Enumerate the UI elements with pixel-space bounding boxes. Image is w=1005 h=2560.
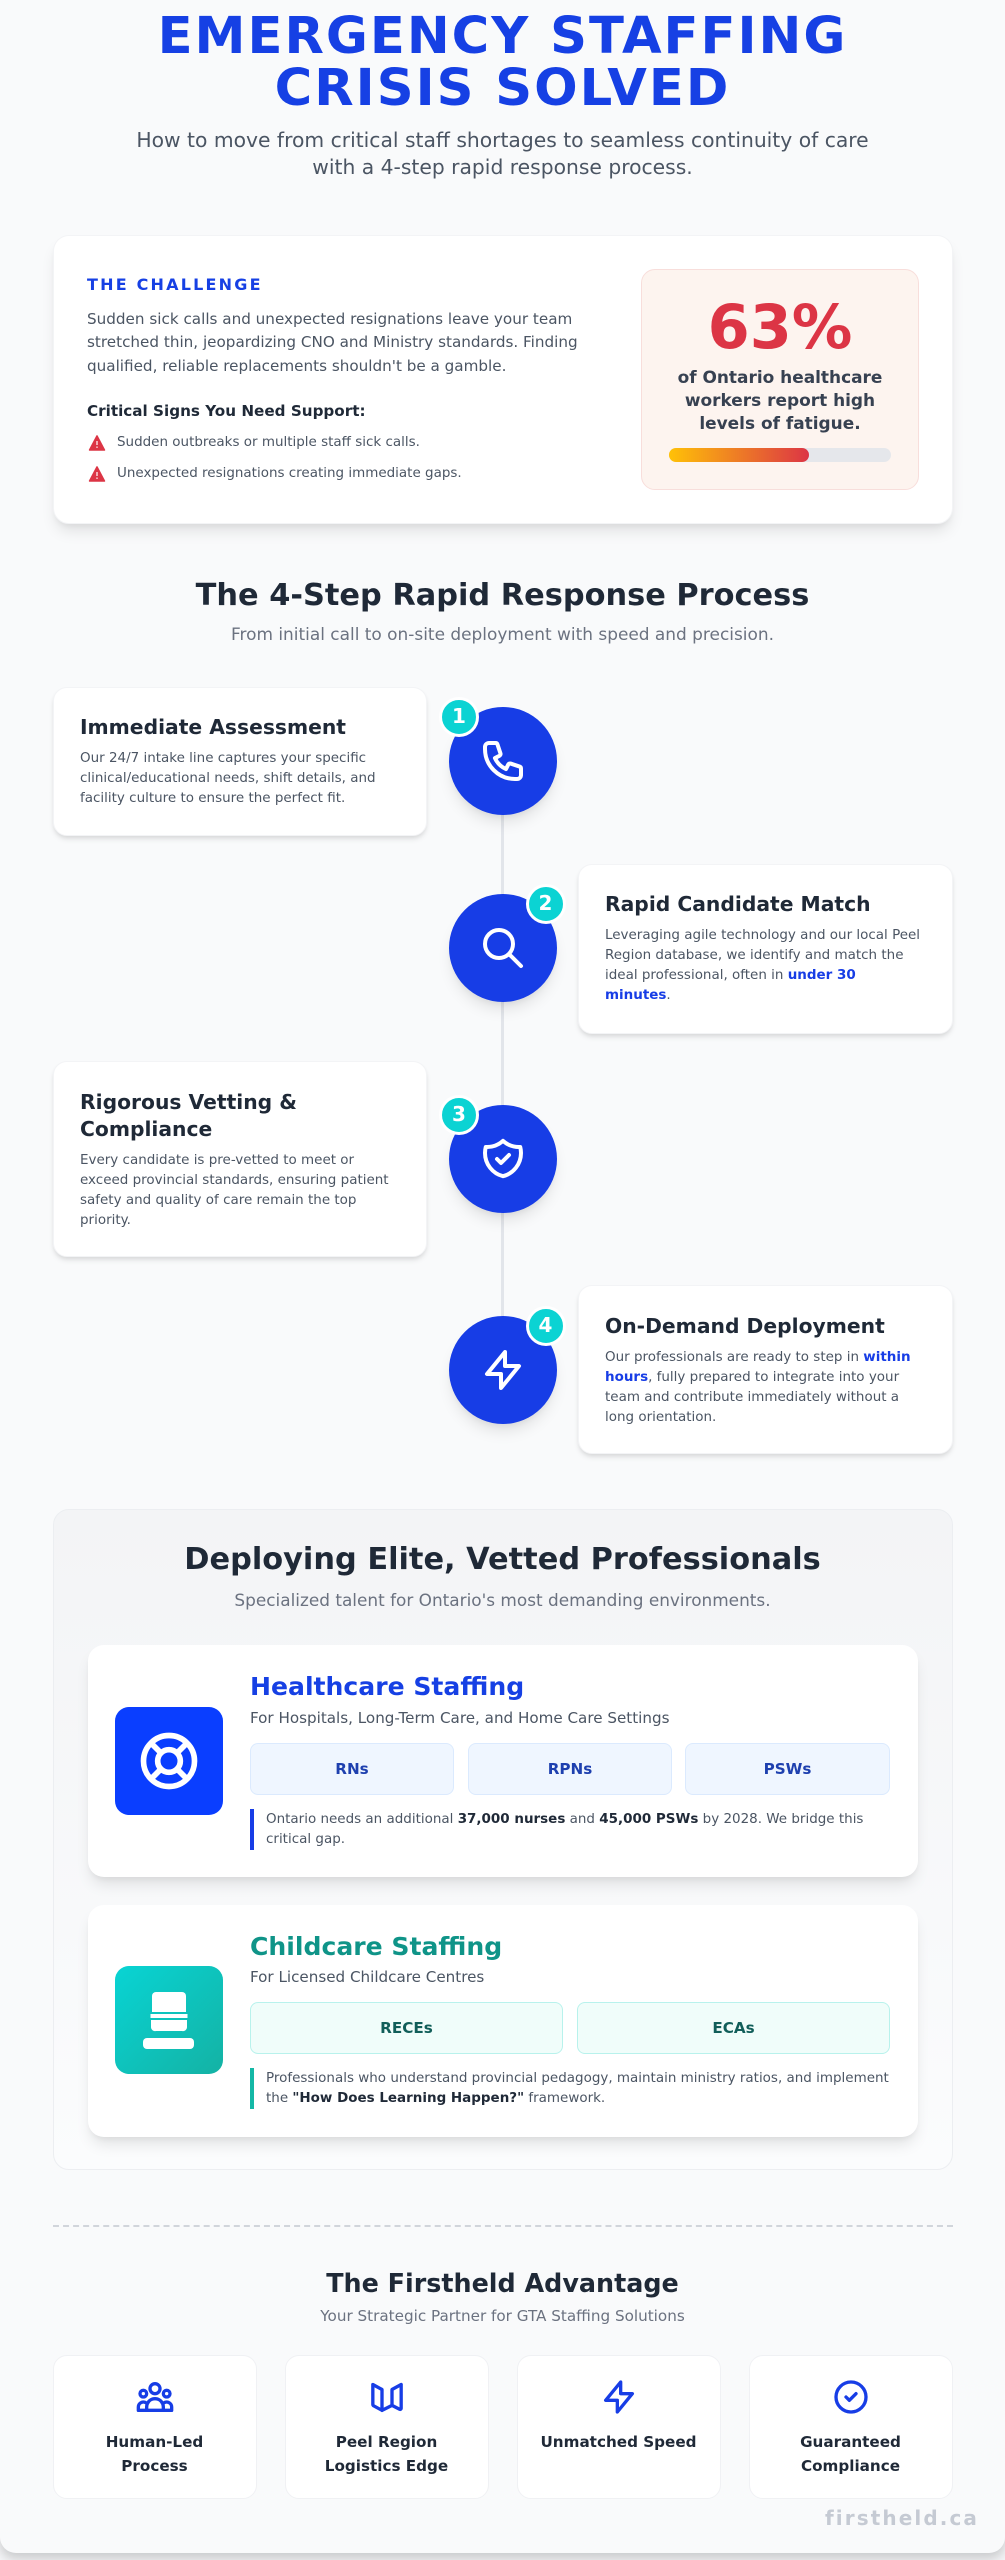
step title: Rapid Candidate Match — [605, 892, 871, 916]
subtitle: How to move from critical staff shortages to seamless continuity of care — [136, 128, 869, 152]
step title: Immediate Assessment — [80, 715, 346, 739]
step 2 badge: 2 — [539, 891, 552, 915]
warning sign 1 — [88, 434, 420, 451]
step 1 badge — [439, 697, 479, 737]
icon: lifebuoy — [115, 1707, 223, 1815]
step text: Leveraging agile technology and our local Peel — [605, 926, 920, 942]
step text: ideal professional, often in under 30 — [605, 967, 856, 983]
tag RPNs: RPNs — [548, 1760, 592, 1778]
step text: long orientation. — [605, 1409, 716, 1425]
advantage card: speed: Unmatched Speed — [540, 2433, 697, 2451]
step text — [80, 750, 376, 806]
step 2 badge — [526, 884, 566, 924]
card title: Healthcare Staffing — [250, 1672, 524, 1701]
step 3 badge: 3 — [452, 1102, 466, 1126]
icon: stack — [115, 1966, 223, 2074]
subtitle — [136, 128, 869, 179]
advantage card: peel region — [284, 2355, 488, 2499]
challenge text: stretched thin, jeopardizing CNO and Ministry standards. Finding — [87, 333, 578, 351]
advantage card: peel region: Logistics Edge — [325, 2457, 448, 2475]
icon: warning triangle — [88, 435, 106, 451]
step text: Our 24/7 intake line captures your specific — [80, 750, 366, 766]
note: Ontario needs an additional 37,000 nurses and 45,000 PSWs by 2028. We bridge this — [266, 1811, 863, 1827]
stat caption — [678, 367, 882, 433]
tag PSWs — [685, 1743, 890, 1795]
step text: exceed provincial standards, ensuring patient — [80, 1172, 389, 1188]
step title: Rigorous Vetting & — [80, 1090, 297, 1114]
advantage card: compliance: Guaranteed — [800, 2433, 901, 2451]
step text — [605, 1348, 911, 1425]
stat caption: levels of fatigue. — [699, 413, 861, 433]
sign text: Sudden outbreaks or multiple staff sick calls. — [117, 434, 420, 450]
step title: Compliance — [80, 1116, 212, 1140]
step 1 icon: phone — [448, 707, 556, 815]
step text: safety and quality of care remain the top — [80, 1192, 356, 1208]
childcare card — [88, 1904, 918, 2136]
stat caption: workers report high — [685, 390, 875, 410]
step text: Region database, we identify and match the — [605, 947, 903, 963]
challenge heading: THE CHALLENGE — [87, 275, 263, 294]
step 4 card — [578, 1285, 952, 1454]
process heading: The 4-Step Rapid Response Process — [196, 578, 809, 612]
tag ECAs — [577, 2002, 890, 2054]
step 3 badge — [439, 1095, 479, 1135]
tag ECAs: ECAs — [712, 2019, 755, 2037]
advantage card: speed — [516, 2355, 720, 2499]
warning sign 2 — [88, 464, 462, 482]
advantage card: human-led process: Human-Led — [106, 2433, 203, 2451]
title: CRISIS SOLVED — [275, 58, 730, 118]
step 1 card — [52, 687, 426, 836]
tag RNs — [250, 1743, 454, 1795]
advantage card: human-led process: Process — [121, 2457, 188, 2475]
stat number: 63% — [708, 293, 852, 363]
panel: professionals — [52, 1509, 952, 2170]
advantage card: compliance: Compliance — [801, 2457, 900, 2475]
step 4 icon: bolt — [448, 1316, 556, 1424]
advantage card: compliance — [748, 2355, 952, 2499]
step title: On-Demand Deployment — [605, 1314, 885, 1338]
step text — [605, 926, 920, 1003]
note: critical gap. — [266, 1831, 345, 1847]
tag RECEs — [250, 2002, 563, 2054]
note: the "How Does Learning Happen?" framework. — [266, 2090, 605, 2106]
progress bar — [669, 448, 891, 462]
challenge text: Sudden sick calls and unexpected resignations leave your team — [87, 310, 572, 328]
card subtitle: For Hospitals, Long-Term Care, and Home Care Settings — [250, 1709, 669, 1727]
step title — [80, 1090, 297, 1140]
tag RPNs — [468, 1743, 672, 1795]
title — [158, 6, 847, 118]
tag PSWs: PSWs — [764, 1760, 811, 1778]
stat caption: of Ontario healthcare — [678, 367, 882, 387]
note: Professionals who understand provincial pedagogy, maintain ministry ratios, and implement — [266, 2070, 889, 2086]
sign text: Unexpected resignations creating immediate gaps. — [117, 464, 462, 480]
step 4 badge: 4 — [539, 1313, 552, 1337]
step text: priority. — [80, 1212, 131, 1228]
title: EMERGENCY STAFFING — [158, 6, 847, 66]
step text: Every candidate is pre-vetted to meet or — [80, 1152, 354, 1168]
advantage card: human-led process — [52, 2355, 256, 2499]
tag RECEs: RECEs — [380, 2019, 433, 2037]
panel: the challenge — [52, 235, 952, 524]
subtitle: with a 4-step rapid response process. — [312, 155, 693, 179]
step 2 icon: search — [448, 894, 556, 1002]
section subheading: Specialized talent for Ontario's most demanding environments. — [234, 1590, 771, 1610]
step text: Our professionals are ready to step in within — [605, 1348, 911, 1364]
card subtitle: For Licensed Childcare Centres — [250, 1968, 484, 1986]
step 1 badge: 1 — [452, 704, 466, 728]
note — [250, 1809, 890, 1850]
step text: clinical/educational needs, shift details, and — [80, 770, 376, 786]
step text: minutes. — [605, 987, 671, 1003]
tag RNs: RNs — [335, 1760, 369, 1778]
advantage heading: The Firstheld Advantage — [326, 2268, 679, 2298]
step 3 icon: shield — [448, 1105, 556, 1213]
critical signs heading: Critical Signs You Need Support: — [87, 402, 366, 420]
section heading: Deploying Elite, Vetted Professionals — [184, 1542, 821, 1577]
step 3 card — [52, 1061, 426, 1257]
footer brand: firstheld.ca — [825, 2506, 979, 2530]
step text: hours, fully prepared to integrate into your — [605, 1369, 899, 1385]
advantage subheading: Your Strategic Partner for GTA Staffing Solutions — [320, 2307, 685, 2325]
step text: team and contribute immediately without a — [605, 1389, 899, 1405]
challenge text — [87, 310, 578, 375]
card title: Childcare Staffing — [250, 1932, 502, 1961]
step text: facility culture to ensure the perfect fit. — [80, 790, 345, 806]
healthcare card — [88, 1645, 918, 1877]
step text — [80, 1152, 389, 1228]
step 4 badge — [526, 1306, 566, 1346]
advantage card: peel region: Peel Region — [336, 2433, 437, 2451]
note — [250, 2068, 890, 2109]
step 2 card — [578, 864, 952, 1034]
process subheading: From initial call to on-site deployment with speed and precision. — [231, 624, 774, 644]
challenge text: qualified, reliable replacements shouldn't be a gamble. — [87, 357, 506, 375]
stat box: 63% — [641, 269, 919, 490]
icon: warning triangle — [88, 466, 106, 482]
